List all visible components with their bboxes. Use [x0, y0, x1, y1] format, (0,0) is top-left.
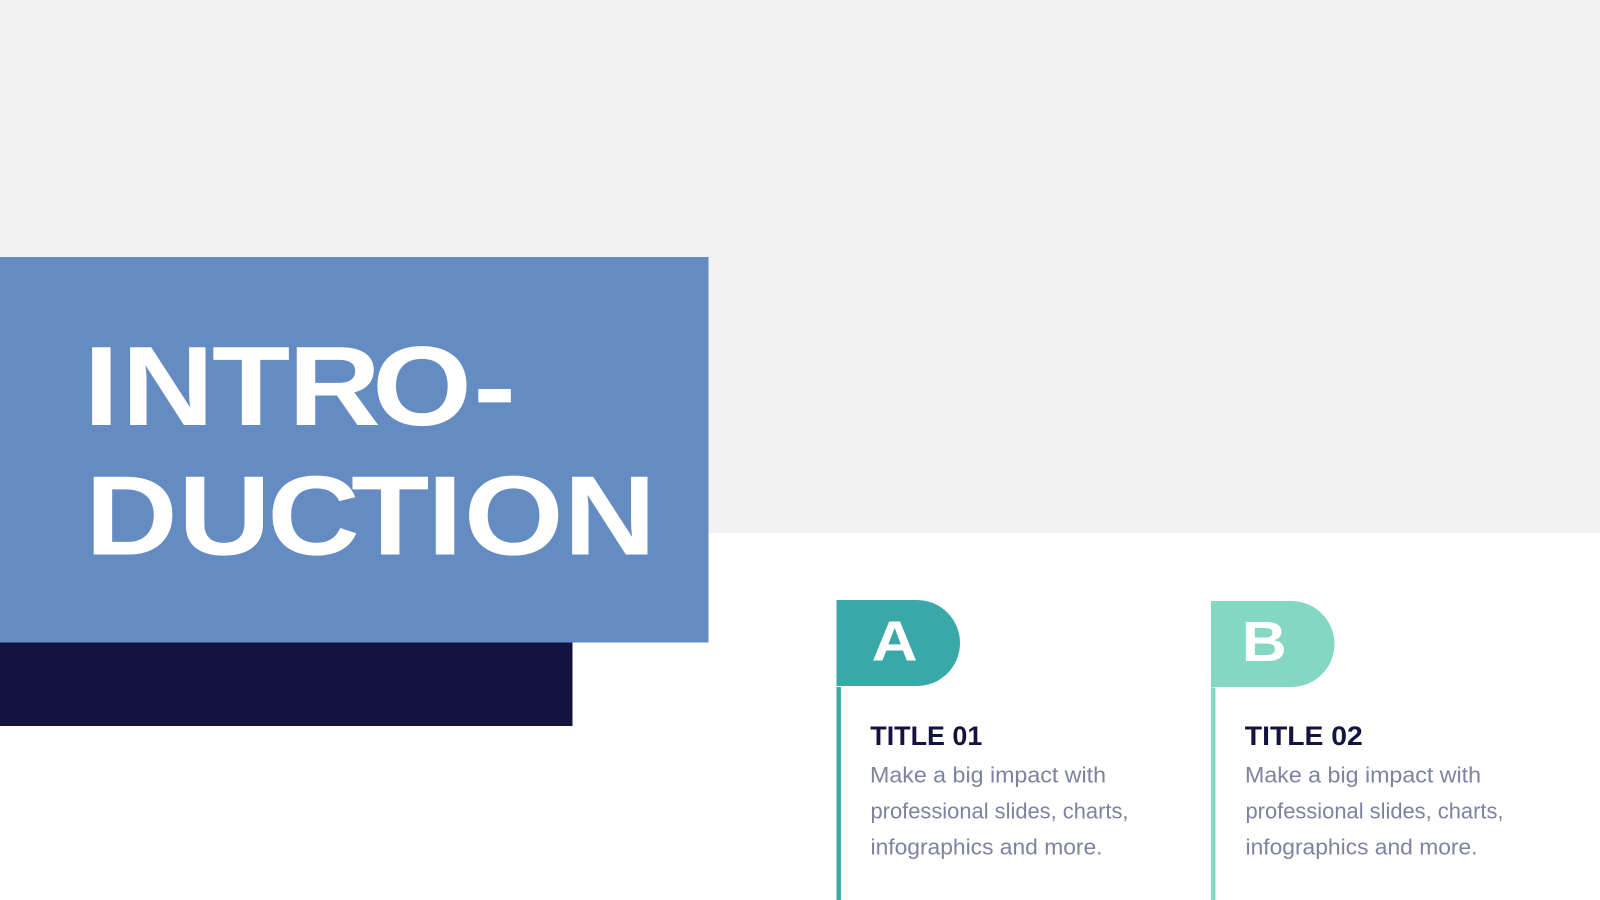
text block: description A — [870, 762, 1128, 859]
navy shadow block — [0, 642, 572, 726]
blue title panel — [0, 257, 708, 642]
text block: description A: Make a big impact with — [870, 762, 1106, 787]
flag pole A — [836, 687, 841, 900]
text block: description A: infographics and more. — [870, 834, 1102, 859]
flag pole B — [1211, 688, 1215, 900]
panel: card A — [836, 600, 1128, 900]
heading: title 02: TITLE 02 — [1245, 721, 1363, 751]
text block: description B: Make a big impact with — [1245, 762, 1481, 787]
title: INTRO- — [84, 323, 516, 449]
title — [84, 323, 656, 579]
title: DUCTION — [85, 453, 656, 579]
text block: description A: professional slides, charts, — [870, 798, 1128, 823]
icon: flag B — [1211, 601, 1334, 687]
text block: description B — [1245, 762, 1504, 859]
flag letter A: A — [872, 610, 918, 674]
heading: title 01: TITLE 01 — [870, 721, 982, 751]
icon: flag A — [836, 600, 960, 686]
panel: card B — [1211, 601, 1504, 900]
grey background band — [0, 0, 1600, 533]
text block: description B: professional slides, charts, — [1246, 798, 1504, 823]
flag letter B: B — [1242, 610, 1287, 674]
text block: description B: infographics and more. — [1246, 834, 1478, 859]
